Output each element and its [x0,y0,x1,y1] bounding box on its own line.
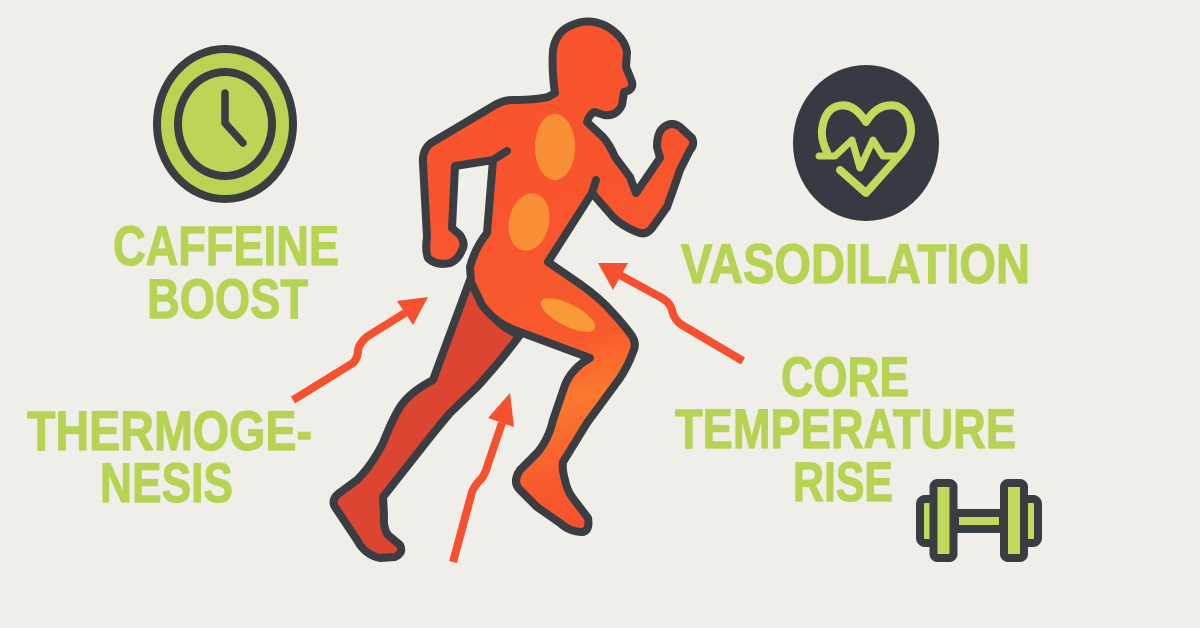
heading: core temperature rise: TEMPERATURE [675,397,1016,460]
icon: heart with pulse [793,65,939,221]
hot spot: shoulder [535,114,575,180]
heading: thermogenesis [27,399,312,514]
heading: caffeine boost: BOOST [147,267,308,330]
arrow: bottom centre [453,393,514,562]
heading: core temperature rise: CORE [781,345,909,408]
heading: core temperature rise: RISE [793,450,893,513]
heading: caffeine boost [113,214,339,330]
heading: thermogenesis: NESIS [100,451,233,514]
heading: vasodilation: VASODILATION [681,232,1030,295]
icon: clock [157,49,293,199]
hot spot: thigh [536,292,600,338]
hot spot: abdomen [503,189,555,255]
back leg [334,280,520,558]
arm crease lines [493,151,596,193]
torso, head, arms and front leg [423,22,693,532]
arrow: thermogenesis [293,297,428,400]
heading: thermogenesis: THERMOGE- [27,399,312,462]
arrow: core temperature [598,263,743,361]
figure: running body [334,22,693,558]
heading: caffeine boost: CAFFEINE [113,214,339,277]
icon: dumbbell [920,483,1038,558]
heading: core temperature rise [675,345,1016,513]
